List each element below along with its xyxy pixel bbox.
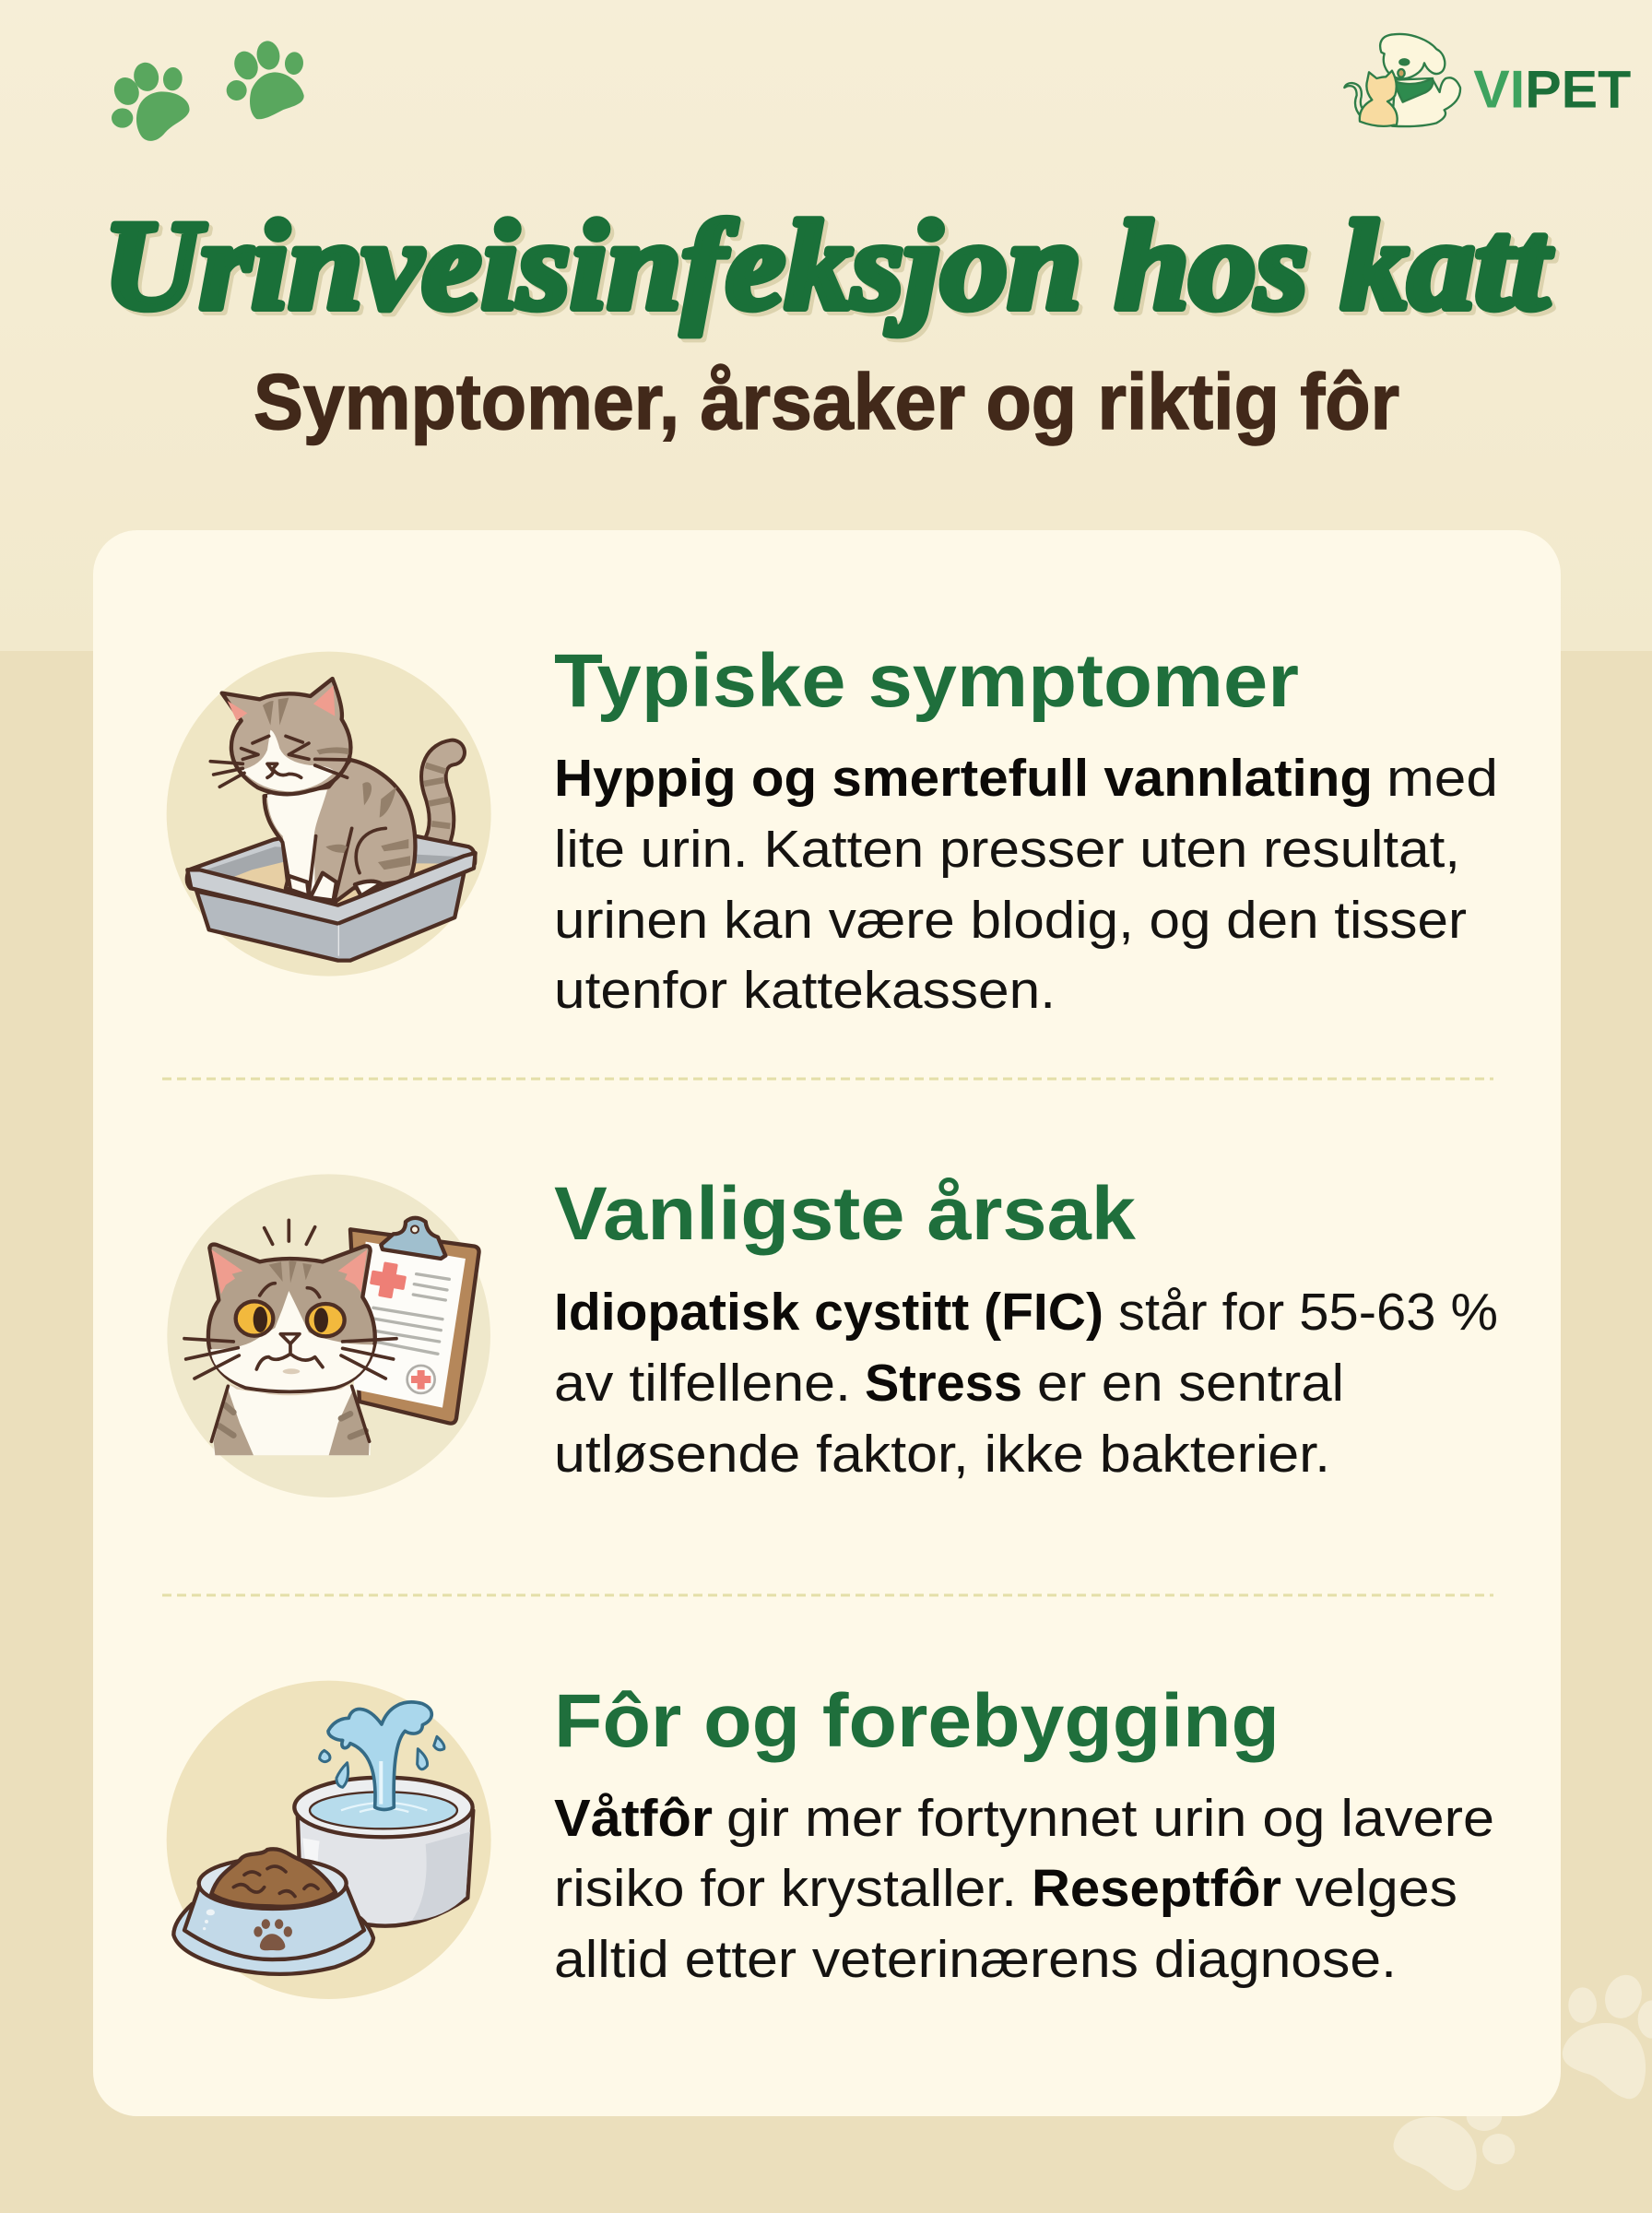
heading: Vanligste årsak: Vanligste årsak (554, 1172, 1136, 1256)
text block: cause: står for 55-63 % (1118, 1283, 1498, 1342)
text block: food and prevention: risiko for krystaller. (554, 1859, 1017, 1918)
logo: VIPET (1344, 34, 1631, 126)
heading: Typiske symptomer: Typiske symptomer (554, 639, 1299, 723)
text block: cause: er en sentral (1037, 1354, 1344, 1413)
text block: symptoms: utenfor kattekassen. (554, 961, 1056, 1020)
text block: food and prevention: gir mer fortynnet urin og lavere (726, 1789, 1494, 1848)
text block: food and prevention: Reseptfôr (1032, 1859, 1281, 1918)
text block: symptoms: lite urin. Katten presser uten resultat, (554, 820, 1460, 879)
text block: cause: Stress (865, 1354, 1022, 1413)
icon: worried cat with clipboard (167, 1174, 490, 1497)
icon: paw on bowl (254, 1919, 292, 1950)
subtitle: Symptomer, årsaker og riktig fôr (254, 359, 1399, 446)
text block: cause: av tilfellene. (554, 1354, 851, 1413)
text block: food and prevention: Våtfôr (554, 1789, 713, 1848)
icon: green paw prints (110, 39, 304, 141)
title: Urinveisinfeksjon hos katt (103, 195, 1552, 336)
heading: Fôr og forebygging: Fôr og forebygging (554, 1679, 1280, 1763)
text block: cause: Idiopatisk cystitt (FIC) (554, 1283, 1103, 1342)
text block: food and prevention: velges (1295, 1859, 1457, 1918)
text block: cause: utløsende faktor, ikke bakterier. (554, 1425, 1330, 1484)
text block: symptoms: urinen kan være blodig, og den tisser (554, 891, 1467, 950)
icon: dog and cat mascot (1344, 34, 1460, 126)
text block: food and prevention: alltid etter veterinærens diagnose. (554, 1930, 1397, 1989)
text block: symptoms: med (1386, 749, 1498, 808)
icon: cat in litter box (167, 652, 491, 976)
panel: main card (93, 530, 1561, 2116)
wordmark: VIPET (1473, 61, 1631, 120)
icon: food bowl and water fountain (167, 1681, 491, 1999)
background paw prints (1394, 1970, 1652, 2191)
title: Urinveisinfeksjon hos katt (107, 198, 1556, 339)
text block: symptoms: Hyppig og smertefull vannlating (554, 749, 1373, 808)
